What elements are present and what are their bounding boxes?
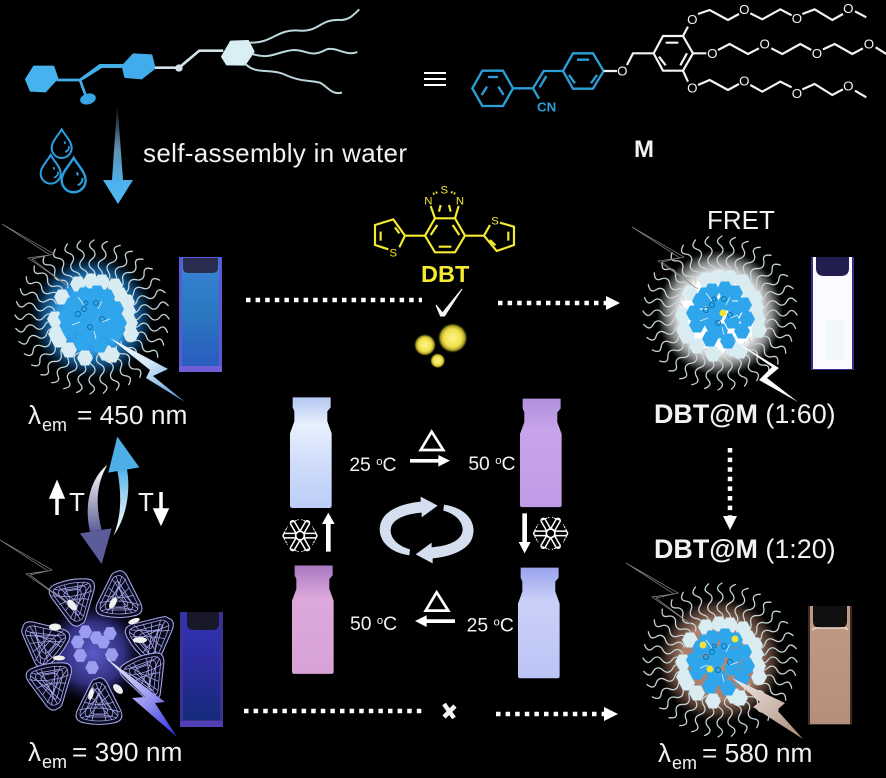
temperature label bottom right: C [500, 615, 514, 636]
label: emission 450 nm: λ [28, 400, 41, 430]
structure: DBT: N [456, 196, 464, 208]
cuvette: blue emission [179, 257, 222, 372]
structure: DBT: S [441, 184, 449, 196]
temperature label top right: 50 [468, 454, 490, 475]
temperature label bottom left: C [383, 614, 397, 635]
icon: check mark [436, 289, 462, 316]
structural formula of M: O [843, 1, 853, 16]
structural formula of M: O [707, 46, 717, 61]
structural formula of M: O [864, 37, 874, 52]
DBT droplets [414, 323, 468, 368]
icon: cross mark [444, 704, 455, 718]
label: emission 390 nm: = 390 nm [72, 737, 182, 767]
temperature arrow pair [80, 437, 139, 564]
temperature label top right: o [495, 455, 502, 467]
micelle: M, blue emission [2, 224, 185, 402]
structural formula of M: O [843, 79, 853, 94]
label: emission 580 nm: λ [658, 738, 671, 768]
label: T up: T [69, 487, 85, 517]
arrow: heating right [410, 455, 450, 467]
structural formula of M: CN [537, 99, 556, 114]
label: emission 580 nm: em [672, 753, 697, 773]
equivalence sign [424, 73, 446, 85]
structure: DBT: S [491, 216, 499, 228]
icon: snowflake right [535, 517, 567, 549]
label: T down: T [138, 487, 154, 517]
structural formula of M: O [687, 81, 697, 96]
micelle: M, violet emission [0, 540, 186, 737]
temperature label bottom right: o [494, 616, 500, 628]
icon: water drops [41, 129, 86, 192]
structure: DBT: S [390, 248, 398, 260]
temperature label bottom right: 25 [467, 615, 488, 636]
label: emission 390 nm: λ [28, 737, 41, 767]
structure: DBT: N [424, 196, 432, 208]
icon: heat triangle bottom [426, 592, 448, 611]
label: emission 450 nm: = 450 nm [77, 400, 187, 430]
temperature label bottom left: o [377, 615, 383, 627]
structural formula of M: O [617, 63, 628, 78]
vial: top left, 25 C [290, 397, 332, 508]
arrow: heating left [415, 615, 455, 627]
cartoon of amphiphilic molecule M [26, 9, 359, 106]
vial: bottom right, 25 C [518, 568, 560, 678]
label: emission 390 nm [28, 737, 182, 772]
dotted arrow: 1:60 to 1:20 [723, 448, 737, 530]
label: T up [52, 484, 85, 517]
label: T down [138, 487, 166, 522]
structural formula of M: O [739, 73, 749, 88]
label: FRET: FRET [707, 205, 775, 235]
label: DBT@M 1:20: DBT@M (1:20) [654, 534, 836, 564]
structural formula of M: O [739, 2, 749, 17]
icon: cycle arrows [380, 497, 474, 563]
cuvette: orange emission [808, 606, 852, 725]
temperature label top left: 25 [349, 455, 371, 476]
temperature label top left: o [376, 456, 383, 468]
label M: M [634, 136, 654, 163]
vial: top right, 50 C [520, 399, 562, 507]
structural formula of M: O [759, 37, 770, 52]
label: DBT@M 1:60: DBT@M (1:60) [654, 399, 836, 429]
cuvette: white emission [811, 257, 854, 370]
structural formula of M: O [687, 12, 697, 27]
arrow: cooling down [519, 513, 531, 553]
structure: DBT [375, 184, 514, 260]
structural formula of M: O [792, 86, 802, 101]
structural formula of M [472, 1, 886, 114]
cuvette: violet emission [180, 612, 223, 727]
label: emission 580 nm: = 580 nm [702, 738, 812, 768]
structural formula of M: O [812, 46, 822, 61]
dotted arrow: to DBT@M [498, 296, 620, 310]
arrow: self-assembly [103, 102, 133, 204]
arrow: cooling up [322, 513, 335, 552]
dotted line: blocked path [244, 709, 422, 713]
dotted arrow: M to DBT [246, 298, 422, 302]
temperature label bottom left: 50 [350, 614, 371, 635]
label: DBT: DBT [421, 261, 470, 287]
label: emission 390 nm: em [42, 752, 67, 772]
vial: bottom left, 50 C [292, 565, 334, 674]
micelle: DBT@M 1:60, white emission [632, 227, 798, 402]
label: emission 450 nm [28, 400, 187, 435]
temperature label top right: C [502, 454, 516, 475]
icon: heat triangle top [421, 432, 443, 450]
structural formula of M: O [792, 11, 802, 26]
temperature label top left: C [383, 455, 397, 476]
dotted arrow: to DBT@M 1:20 [496, 707, 618, 721]
label: emission 450 nm: em [42, 415, 67, 435]
label: self-assembly in water: self-assembly in water [143, 138, 407, 168]
icon: snowflake left [284, 520, 316, 552]
label: emission 580 nm [658, 738, 812, 773]
reversibility cycle panel [284, 397, 567, 678]
micelle: DBT@M 1:20, orange emission [626, 563, 803, 739]
